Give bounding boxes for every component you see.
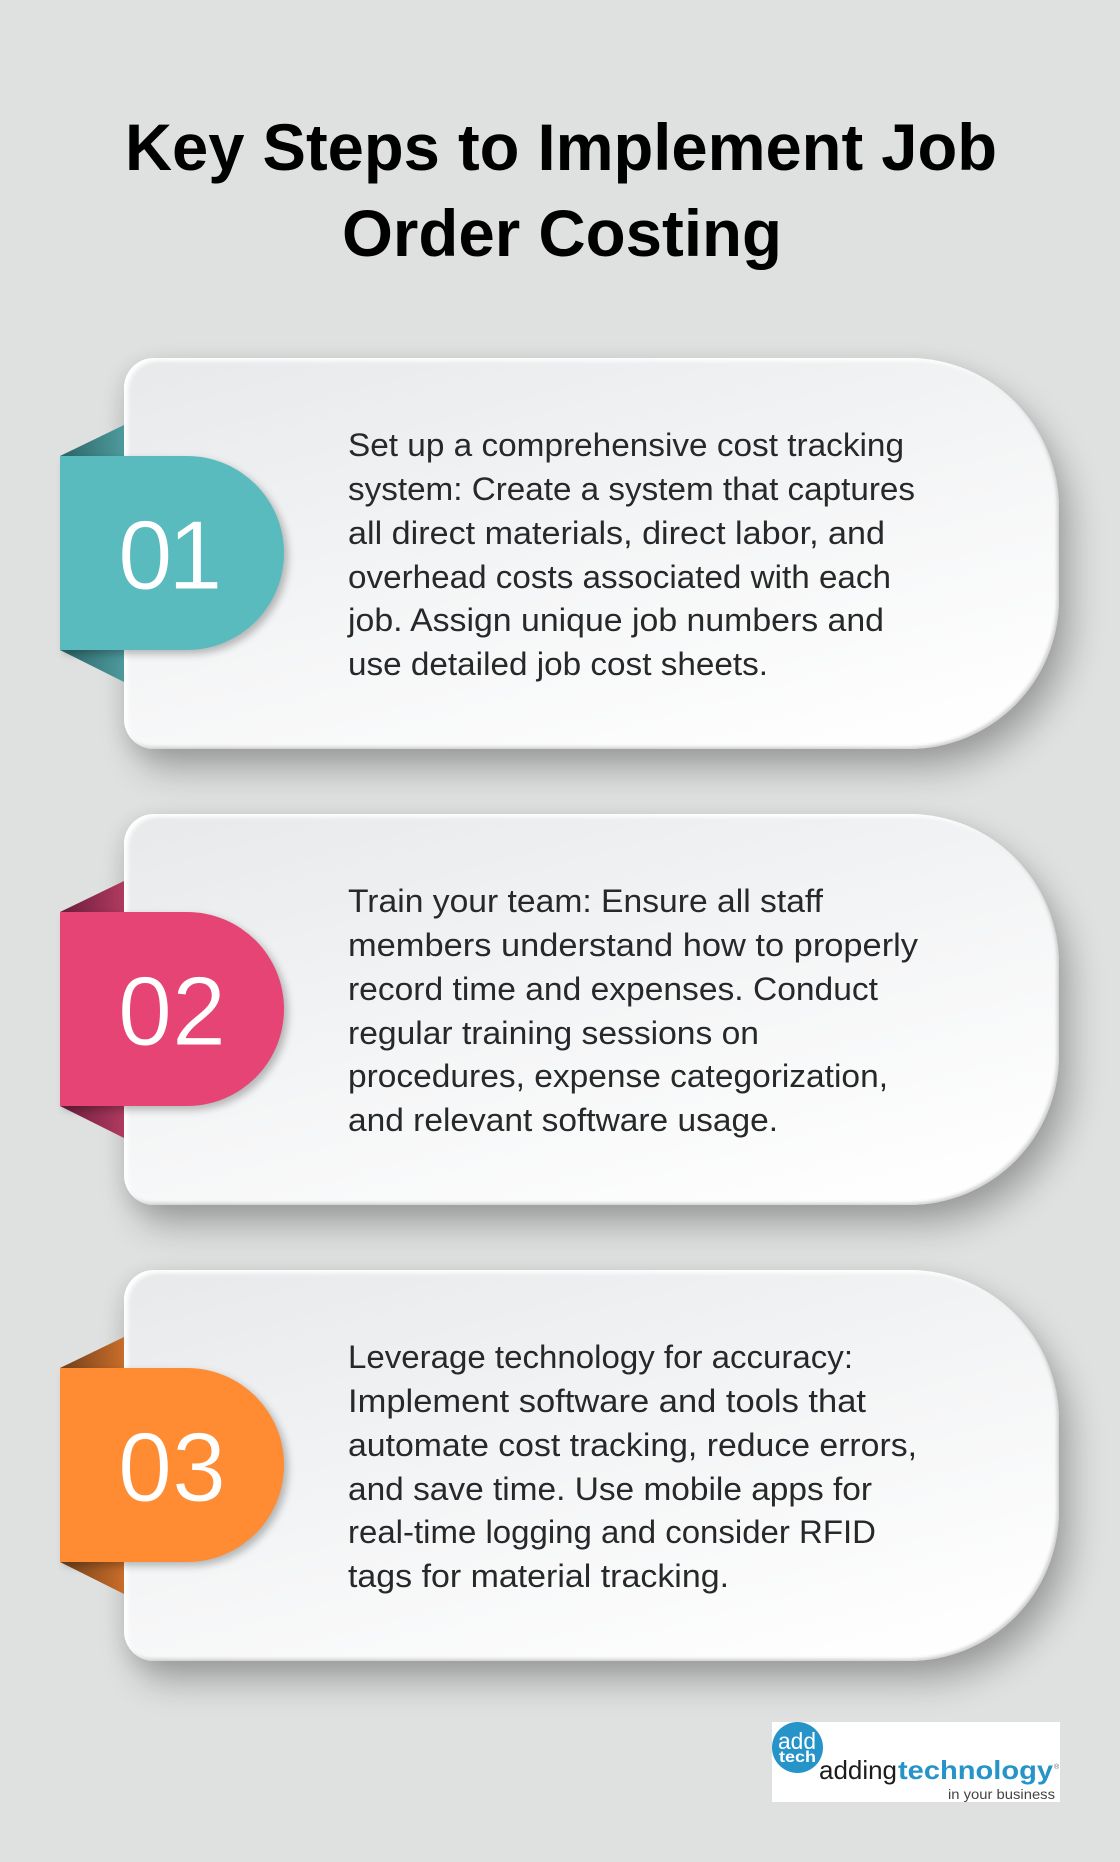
number badge 03: 03 (118, 1412, 226, 1522)
icon: add tech circle: add (778, 1728, 816, 1754)
title: Order Costing (342, 196, 782, 270)
step 3 text (348, 1339, 917, 1594)
card background 2 (124, 814, 1059, 1205)
ribbon folds 3 (60, 1337, 124, 1594)
step 2 text: regular training sessions on (348, 1015, 759, 1051)
panel: step 3 (60, 1266, 1089, 1699)
logo: adding technology (772, 1722, 1060, 1802)
step 3 text: Implement software and tools that (348, 1383, 866, 1419)
step 3 text: tags for material tracking. (348, 1558, 729, 1594)
step 2 text (348, 883, 918, 1138)
logo: adding technology: ® (1054, 1763, 1060, 1771)
number badge 01: 01 (118, 500, 223, 610)
title: Key Steps to Implement Job (125, 110, 997, 184)
logo: adding technology: in your business (948, 1786, 1055, 1802)
number badge 01 (60, 456, 284, 650)
step 1 text: system: Create a system that captures (348, 471, 915, 507)
step 1 text: use detailed job cost sheets. (348, 646, 768, 682)
step 1 text (347, 427, 915, 682)
ribbon folds 2 (60, 881, 124, 1138)
step 1 text: all direct materials, direct labor, and (348, 515, 885, 551)
card background 1 (124, 358, 1059, 749)
number badge 02: 02 (118, 956, 226, 1066)
step 2 text: and relevant software usage. (348, 1102, 778, 1138)
step 2 text: record time and expenses. Conduct (348, 971, 878, 1007)
step 2 text: procedures, expense categorization, (348, 1058, 888, 1094)
step 1 text: job. Assign unique job numbers and (347, 602, 884, 638)
card background 3 (124, 1270, 1059, 1661)
step 3 text: real-time logging and consider RFID (348, 1514, 876, 1550)
ribbon folds 1 (60, 425, 124, 682)
panel: step 1 (60, 354, 1089, 787)
title (125, 110, 997, 270)
logo: adding technology: technology (898, 1755, 1054, 1785)
number badge 02 (60, 912, 284, 1106)
number badge 03 (60, 1368, 284, 1562)
icon: add tech circle (772, 1722, 823, 1773)
step 3 text: automate cost tracking, reduce errors, (348, 1427, 917, 1463)
step 1 text: overhead costs associated with each (348, 559, 891, 595)
step 2 text: Train your team: Ensure all staff (348, 883, 823, 919)
step 2 text: members understand how to properly (348, 927, 918, 963)
step 1 text: Set up a comprehensive cost tracking (348, 427, 904, 463)
logo: adding technology: adding (819, 1755, 897, 1785)
step 3 text: Leverage technology for accuracy: (348, 1339, 853, 1375)
panel: step 2 (60, 810, 1089, 1243)
icon: add tech circle: tech (779, 1749, 816, 1766)
step 3 text: and save time. Use mobile apps for (348, 1471, 872, 1507)
